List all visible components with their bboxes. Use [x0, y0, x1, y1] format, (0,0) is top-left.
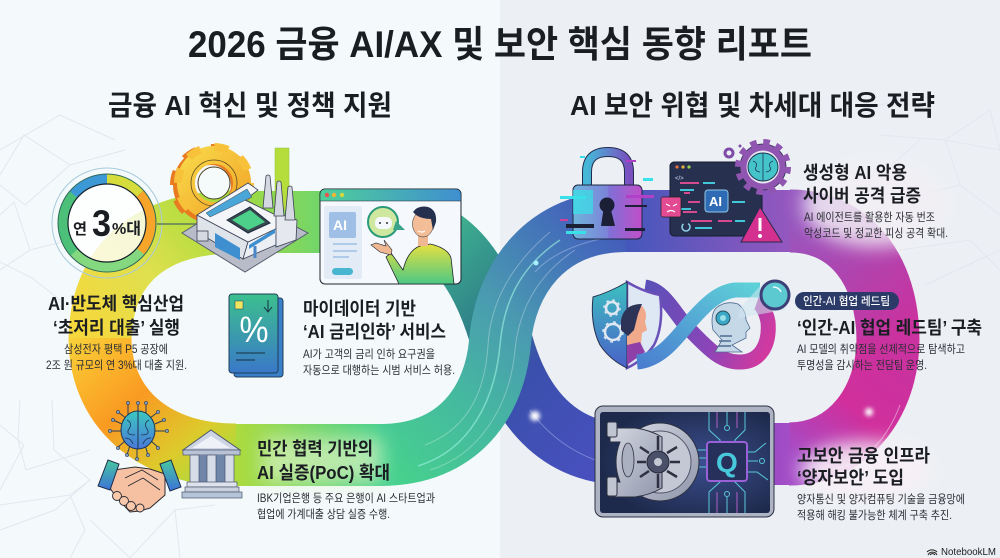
- icon: angry face: [661, 197, 681, 217]
- text: red team: AI 모델의 취약점을 선제적으로 탐색하고: [797, 342, 965, 356]
- text: PoC: 민간 협력 기반의: [257, 439, 373, 459]
- text: AI semiconductor: AI·반도체 핵심산업: [48, 294, 184, 314]
- text: MyData: AI가 고객의 금리 인하 요구권을: [303, 347, 435, 361]
- text: AI semiconductor: [46, 294, 187, 372]
- text: AI semiconductor: ‘초저리 대출’ 실행: [53, 318, 180, 338]
- text: generative AI: 악성코드 및 정교한 피싱 공격 확대.: [804, 226, 948, 240]
- icon: warning triangle: [741, 207, 782, 242]
- ribbon: left loop: [100, 222, 381, 455]
- text: generative AI: 생성형 AI 악용: [803, 163, 907, 183]
- icon: browser card with AI assistant: AI: [333, 217, 347, 233]
- text: MyData: 자동으로 대행하는 시범 서비스 허용.: [303, 363, 455, 377]
- ribbon: right loop: [624, 221, 888, 454]
- icon: code window: AI: [709, 194, 722, 209]
- icon: donut 3%: 3: [92, 203, 111, 244]
- title: 2026 금융 AI/AX 및 보안 핵심 동향 리포트: [188, 24, 812, 65]
- icon: glitch padlock: [560, 152, 654, 239]
- text: quantum security: 적용해 해킹 불가능한 체계 구축 추진.: [797, 509, 952, 522]
- icon: Q chip: Q: [716, 447, 738, 478]
- text: quantum security: 양자통신 및 양자컴퓨팅 기술을 금융망에: [797, 493, 965, 506]
- icon: shield and infinity: [592, 281, 789, 368]
- icon: donut 3%: %대: [112, 220, 141, 238]
- icon: quantum vault: [595, 406, 774, 517]
- badge: human-AI red team: [795, 292, 899, 310]
- text: MyData: ‘AI 금리인하’ 서비스: [303, 322, 446, 342]
- text: PoC: AI 실증(PoC) 확대: [257, 463, 390, 483]
- glow behind text on ribbons: [262, 163, 947, 498]
- text: MyData: 마이데이터 기반: [303, 299, 416, 319]
- badge: human-AI red team: 인간-AI 협업 레드팀: [803, 294, 890, 308]
- icon: donut 3%: [52, 168, 162, 278]
- text: PoC: [257, 439, 435, 521]
- shield: [592, 282, 661, 368]
- icon: percent document: %: [240, 309, 268, 350]
- text: generative AI: [803, 163, 948, 240]
- heading: right section: AI 보안 위협 및 차세대 대응 전략: [570, 90, 935, 121]
- text: MyData: [303, 299, 455, 377]
- icon: browser card with AI assistant: [320, 189, 461, 284]
- person: [371, 207, 454, 284]
- text: red team: 투명성을 감시하는 전담팀 운영.: [797, 358, 927, 372]
- text: PoC: IBK기업은행 등 주요 은행이 AI 스타트업과: [257, 492, 435, 505]
- heading: left section: 금융 AI 혁신 및 정책 지원: [108, 90, 392, 121]
- icon: donut 3%: 연: [73, 221, 87, 238]
- text: red team: [797, 318, 982, 372]
- text: quantum security: ‘양자보안’ 도입: [797, 468, 904, 488]
- text: generative AI: AI 에이전트를 활용한 자동 번조: [804, 210, 935, 224]
- ribbon: centre crossing: [380, 221, 900, 474]
- vault door: [607, 422, 699, 501]
- text: AI semiconductor: 삼성전자 평택 P5 공장에: [64, 343, 168, 356]
- icon: code window: </>: [675, 176, 684, 182]
- icon: gear and factory: [157, 147, 308, 272]
- text: generative AI: 사이버 공격 급증: [803, 186, 921, 206]
- icon: magnifier lens: [738, 281, 789, 318]
- icon: code window: [661, 142, 788, 242]
- icon: robot head: [712, 303, 750, 352]
- icon: chatbot bubble: [368, 207, 405, 237]
- text: quantum security: [797, 446, 965, 522]
- icon: bank: [182, 430, 242, 498]
- text: AI semiconductor: 2조 원 규모의 연 3%대 대출 지원.: [46, 358, 187, 372]
- text: quantum security: 고보안 금융 인프라: [797, 446, 930, 466]
- gear: [174, 147, 250, 222]
- icon: brain gear: [738, 142, 788, 192]
- text: PoC: 협업에 가계대출 상담 실증 수행.: [257, 508, 390, 521]
- icon: Q chip: [707, 442, 747, 481]
- text: red team: ‘인간-AI 협업 레드팀’ 구축: [797, 318, 982, 338]
- watermark: NotebookLM: NotebookLM: [941, 546, 996, 558]
- icon: AI brain: [108, 401, 169, 461]
- icon: handshake: [98, 460, 181, 512]
- icon: percent document: [229, 294, 283, 377]
